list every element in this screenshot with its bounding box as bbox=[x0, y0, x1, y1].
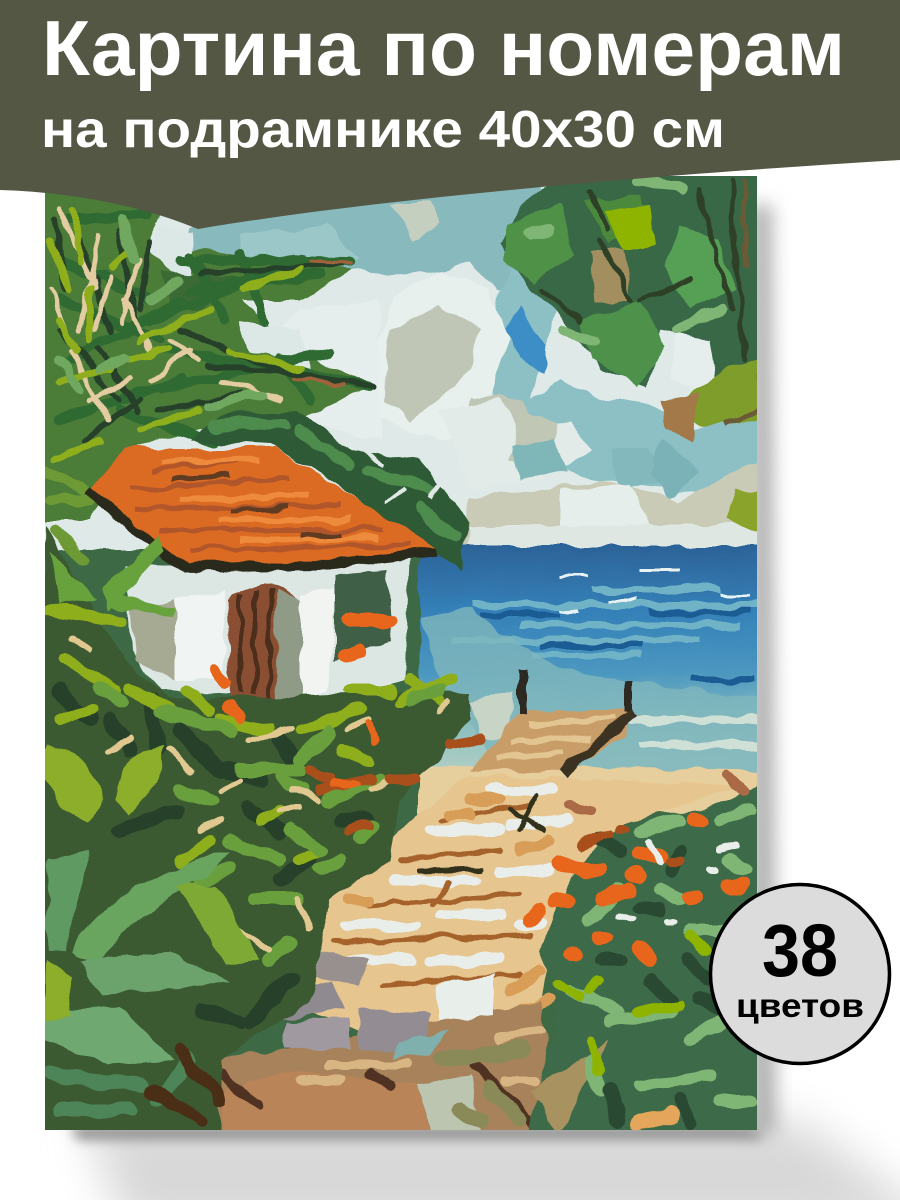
orange flowers near house bbox=[215, 620, 480, 830]
brown ground and stones bbox=[218, 951, 549, 1130]
painting: seaside cottage bbox=[30, 170, 770, 1140]
badge label: цветов bbox=[736, 987, 864, 1024]
badge number: 38 bbox=[762, 909, 838, 992]
lower right flower bush bbox=[530, 775, 770, 1140]
canvas drop shadow bbox=[70, 205, 900, 1200]
sandy path bbox=[300, 775, 735, 1060]
orange tiled roof bbox=[88, 448, 435, 568]
lower left plants bbox=[30, 525, 470, 1140]
badge: 38 colours bbox=[710, 884, 890, 1064]
left palm fronds bbox=[30, 170, 375, 560]
title: Картина по номерам bbox=[42, 4, 845, 92]
bush above roof bbox=[190, 410, 470, 570]
house wall and door bbox=[125, 560, 410, 705]
top right tree bbox=[500, 170, 770, 535]
sea bbox=[420, 546, 770, 820]
header banner bbox=[0, 0, 900, 229]
pier bbox=[470, 668, 635, 775]
subtitle: на подрамнике 40х30 см bbox=[41, 101, 725, 159]
sky and clouds bbox=[30, 170, 770, 550]
